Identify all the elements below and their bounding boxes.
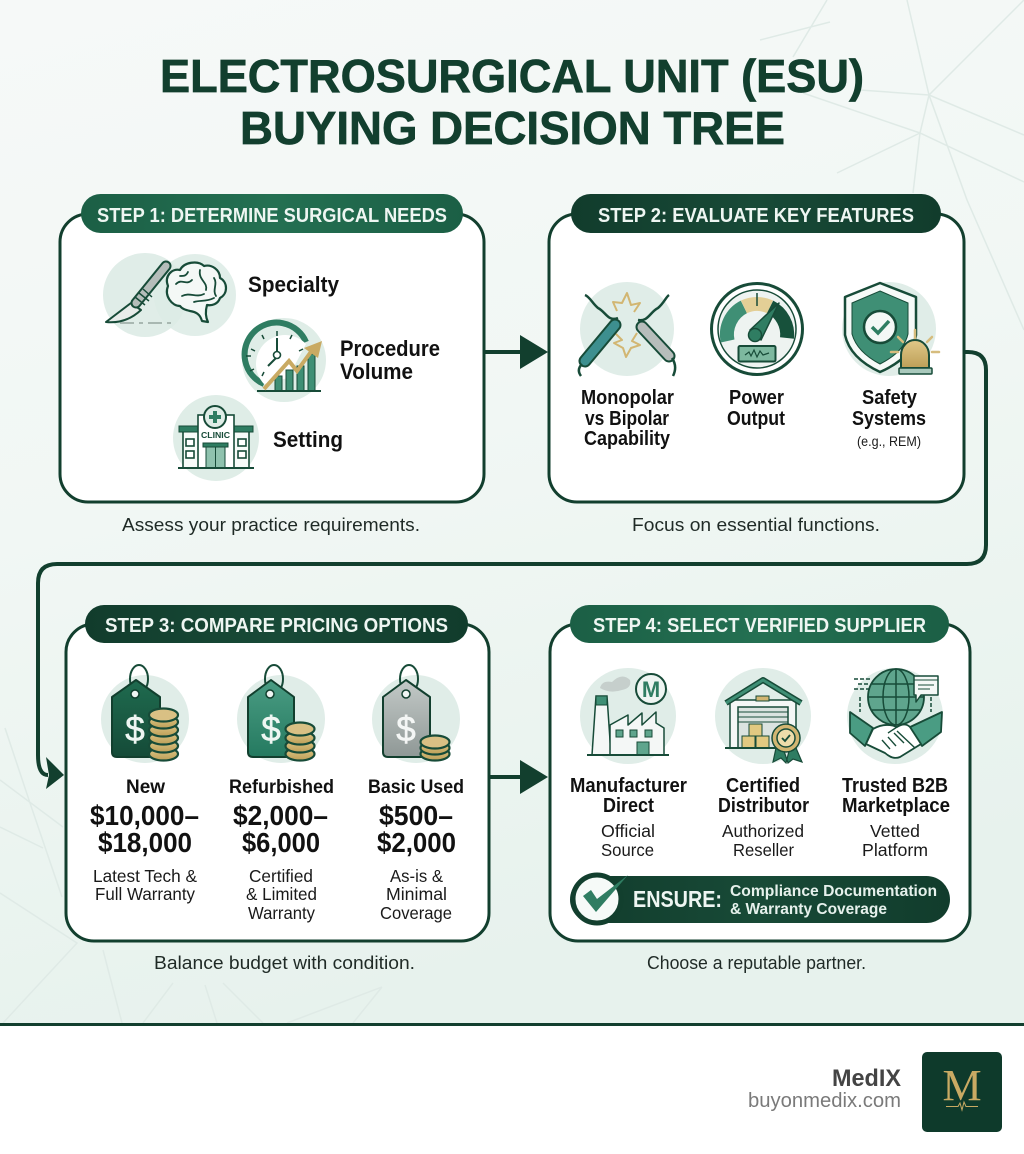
label: basic used pricing: $2,000 bbox=[377, 827, 456, 858]
label: trusted B2B marketplace: Vetted bbox=[870, 821, 920, 841]
label: trusted B2B marketplace: Platform bbox=[862, 840, 928, 860]
heading: step 4: STEP 4: SELECT VERIFIED SUPPLIER bbox=[593, 614, 926, 637]
brand url: buyonmedix.com bbox=[748, 1090, 901, 1112]
label: safety systems bbox=[852, 387, 926, 449]
icon: refurbished price tag with coins bbox=[237, 665, 325, 763]
heading: step 3: STEP 3: COMPARE PRICING OPTIONS bbox=[105, 614, 448, 637]
icon: safety shield and alarm bbox=[842, 282, 939, 376]
heading: step 2 bbox=[571, 194, 941, 233]
label: refurbished pricing: & Limited bbox=[246, 884, 317, 904]
title: ELECTROSURGICAL UNIT (ESU) bbox=[160, 50, 864, 102]
label: basic used pricing: $500– bbox=[379, 800, 453, 831]
icon: clinic building bbox=[173, 395, 259, 481]
label: basic used pricing bbox=[368, 777, 464, 923]
label: refurbished pricing: Warranty bbox=[248, 903, 315, 923]
label: certified distributor: Distributor bbox=[718, 795, 809, 817]
heading: step 2: STEP 2: EVALUATE KEY FEATURES bbox=[598, 204, 914, 227]
label: certified distributor: Authorized bbox=[722, 821, 804, 841]
icon: warehouse with certificate seal bbox=[715, 668, 811, 764]
label: trusted B2B marketplace: Marketplace bbox=[842, 795, 950, 817]
label: manufacturer direct: Official bbox=[601, 821, 655, 841]
heading: step 4 bbox=[570, 605, 949, 643]
label: power output bbox=[727, 387, 785, 430]
icon: clock with growth chart bbox=[242, 318, 326, 402]
label: new pricing: $10,000– bbox=[90, 800, 199, 831]
arrow: step 1 to step 2 bbox=[484, 335, 548, 369]
label: refurbished pricing: Refurbished bbox=[229, 777, 334, 798]
label: new pricing: Full Warranty bbox=[95, 884, 195, 904]
panel: step 3 bbox=[66, 605, 489, 941]
caption: step 1: Assess your practice requirements. bbox=[122, 515, 420, 535]
label: manufacturer direct: Source bbox=[601, 840, 654, 860]
label: monopolar vs bipolar capability: vs Bipolar bbox=[585, 408, 669, 430]
caption: step 3: Balance budget with condition. bbox=[154, 953, 415, 973]
label: new pricing: $18,000 bbox=[98, 827, 192, 858]
label: manufacturer direct: Direct bbox=[603, 795, 654, 817]
label: trusted B2B marketplace: Trusted B2B bbox=[842, 775, 948, 797]
label: refurbished pricing: Certified bbox=[249, 866, 313, 886]
callout: ensure compliance: ENSURE: bbox=[633, 886, 722, 912]
label: safety systems: (e.g., REM) bbox=[857, 433, 921, 449]
heading: step 3 bbox=[85, 605, 468, 643]
arrow: step 2 to step 3 connector bbox=[38, 352, 986, 789]
icon: check badge bbox=[573, 875, 628, 923]
label: power output: Output bbox=[727, 408, 785, 430]
callout: ensure compliance bbox=[570, 875, 950, 923]
label: basic used pricing: Coverage bbox=[380, 903, 452, 923]
icon: factory bbox=[580, 668, 676, 764]
heading: step 1 bbox=[81, 194, 463, 233]
label: basic used pricing: Minimal bbox=[386, 884, 447, 904]
caption: step 4: Choose a reputable partner. bbox=[647, 953, 866, 973]
label: setting: Setting bbox=[273, 427, 343, 452]
logo: M bbox=[942, 1061, 982, 1110]
brand name: MedIX bbox=[832, 1065, 901, 1092]
icon: globe and handshake bbox=[847, 668, 943, 764]
label: procedure volume: Procedure bbox=[340, 336, 440, 361]
label: procedure volume: Volume bbox=[340, 359, 413, 384]
label: safety systems: Systems bbox=[852, 408, 926, 430]
caption: step 2: Focus on essential functions. bbox=[632, 515, 880, 535]
label: safety systems: Safety bbox=[862, 387, 918, 409]
footer bbox=[0, 1023, 1024, 1154]
label: basic used pricing: Basic Used bbox=[368, 777, 464, 798]
label: refurbished pricing bbox=[229, 777, 334, 923]
label: new pricing bbox=[90, 777, 199, 904]
label: manufacturer direct bbox=[570, 775, 687, 860]
callout: ensure compliance: & Warranty Coverage bbox=[730, 901, 887, 918]
label: monopolar vs bipolar capability: Monopolar bbox=[581, 387, 674, 409]
label: certified distributor: Certified bbox=[726, 775, 800, 797]
label: basic used pricing: As-is & bbox=[390, 866, 443, 886]
icon: scalpel and brain bbox=[103, 253, 236, 337]
label: new pricing: Latest Tech & bbox=[93, 866, 197, 886]
title: BUYING DECISION TREE bbox=[240, 102, 785, 154]
heading: step 1: STEP 1: DETERMINE SURGICAL NEEDS bbox=[97, 204, 447, 227]
panel: step 1 bbox=[60, 194, 484, 502]
icon: monopolar and bipolar electrodes bbox=[579, 282, 675, 376]
icon: clinic building: CLINIC bbox=[201, 431, 230, 440]
panel: step 4 bbox=[550, 605, 970, 941]
icon: used price tag with coins: $ bbox=[396, 710, 416, 749]
label: refurbished pricing: $2,000– bbox=[233, 800, 328, 831]
panel: step 2 bbox=[549, 194, 964, 502]
callout: ensure compliance: Compliance Documentation bbox=[730, 883, 937, 900]
label: refurbished pricing: $6,000 bbox=[242, 827, 320, 858]
label: procedure volume bbox=[340, 336, 440, 384]
label: power output: Power bbox=[729, 387, 784, 409]
label: certified distributor bbox=[718, 775, 809, 860]
icon: used price tag with coins bbox=[372, 665, 460, 763]
label: certified distributor: Reseller bbox=[733, 840, 794, 860]
title bbox=[160, 50, 864, 154]
icon: power gauge bbox=[712, 284, 802, 374]
icon: refurbished price tag with coins: $ bbox=[261, 710, 281, 749]
label: monopolar vs bipolar capability bbox=[581, 387, 674, 450]
label: new pricing: New bbox=[126, 777, 165, 798]
arrow: step 3 to step 4 bbox=[489, 760, 548, 794]
label: monopolar vs bipolar capability: Capability bbox=[584, 428, 671, 450]
label: specialty: Specialty bbox=[248, 272, 340, 297]
label: trusted B2B marketplace bbox=[842, 775, 950, 860]
icon: new price tag with coins: $ bbox=[125, 710, 145, 749]
icon: new price tag with coins bbox=[101, 665, 189, 763]
icon: factory: M bbox=[642, 677, 660, 702]
label: manufacturer direct: Manufacturer bbox=[570, 775, 687, 797]
logo bbox=[922, 1052, 1002, 1132]
